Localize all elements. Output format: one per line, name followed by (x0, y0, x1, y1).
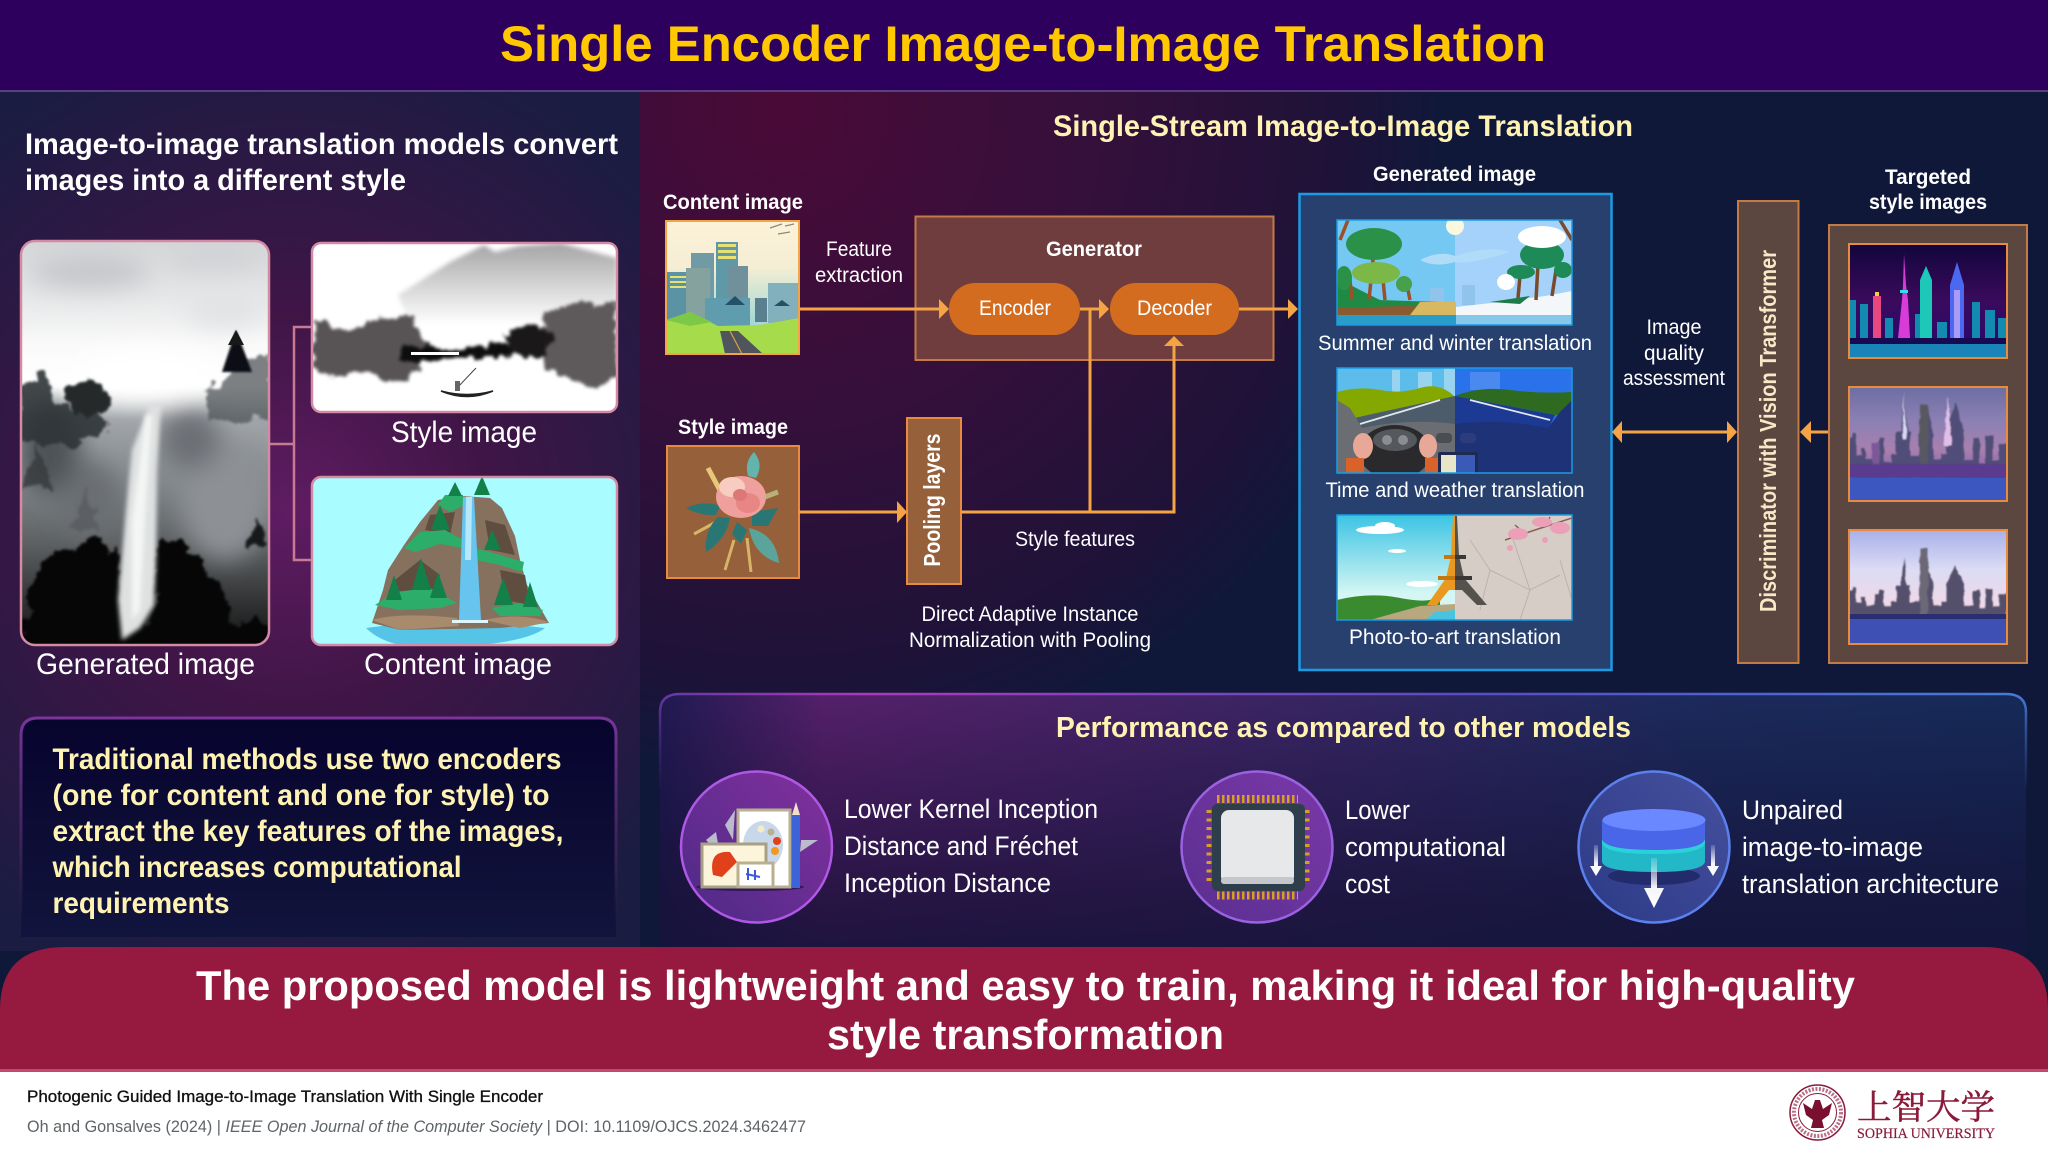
double arrow (1612, 421, 1737, 443)
text: unpaired architecture: Unpaired (1742, 795, 1843, 825)
image quality assessment label (1623, 315, 1725, 390)
text: unpaired architecture (1742, 795, 1999, 899)
connector lines (269, 327, 312, 560)
footer (0, 1072, 2048, 1152)
callout: traditional methods: extract the key features of the images, (52, 815, 564, 848)
citation details: Oh and Gonsalves (2024) | IEEE Open Journal of the Computer Society | DOI: 10.1109/OJCS.2024.3462477 (27, 1117, 806, 1136)
AdaIN caption (909, 602, 1151, 652)
image quality assessment label: assessment (1623, 366, 1725, 390)
generator block: Generator (1046, 237, 1143, 261)
text: lower distances: Distance and Fréchet (844, 831, 1078, 861)
logo: Sophia University (1790, 1080, 1995, 1142)
neon city (1849, 244, 2007, 358)
targeted style images panel (1829, 225, 2027, 663)
citation title: Photogenic Guided Image-to-Image Translation With Single Encoder (27, 1087, 543, 1106)
header band with title (0, 0, 2048, 92)
diagram heading: Single-Stream Image-to-Image Translation (1053, 110, 1633, 143)
AdaIN caption: Direct Adaptive Instance (922, 602, 1138, 626)
content colourful mountain image (312, 476, 617, 645)
image quality assessment label: quality (1644, 341, 1704, 365)
time and weather image (1337, 368, 1572, 479)
header band with title: Single Encoder Image-to-Image Translation (500, 16, 1546, 72)
icon: processor chip (1182, 772, 1332, 922)
image captions: Generated image (36, 648, 255, 681)
left heading: images into a different style (25, 164, 406, 197)
text: lower distances: Lower Kernel Inception (844, 794, 1098, 824)
content city image (666, 221, 799, 354)
pooling layers block (907, 418, 961, 584)
text: lower computational cost: cost (1345, 869, 1390, 899)
image captions (36, 416, 552, 681)
image captions: Content image (364, 648, 552, 681)
logo: Sophia University: SOPHIA UNIVERSITY (1857, 1126, 1995, 1142)
performance heading: Performance as compared to other models (1056, 712, 1631, 744)
conclusion banner (0, 947, 2048, 1072)
fisherman on boat (441, 368, 493, 396)
icon: database with arrows (1578, 772, 1730, 922)
flow arrows (799, 299, 1298, 523)
image quality assessment label: Image (1646, 315, 1702, 339)
translation captions: Time and weather translation (1326, 478, 1584, 502)
translation captions: Summer and winter translation (1318, 331, 1592, 355)
photo to art image (1337, 515, 1572, 620)
style features label: Style features (1015, 527, 1135, 551)
watercolor purple city (1849, 387, 2007, 501)
logo: Sophia University: 上智大学 (1857, 1080, 1995, 1129)
arrow from targeted style (1800, 421, 1828, 443)
text: lower computational cost: computational (1345, 832, 1506, 862)
style flower image (667, 446, 799, 578)
targeted style images label: Targeted (1885, 165, 1971, 189)
style ink landscape image (312, 243, 617, 412)
conclusion banner: style transformation (827, 1011, 1224, 1058)
icon: art frames and palette (681, 772, 832, 922)
style image label: Style image (678, 415, 788, 439)
decoder: Decoder (1137, 296, 1212, 320)
generator block (916, 216, 1274, 360)
image captions: Style image (391, 416, 537, 449)
background: right panel (640, 91, 2048, 951)
summer and winter image (1336, 217, 1572, 325)
callout: traditional methods: Traditional methods use two encoders (52, 743, 562, 776)
callout: traditional methods: requirements (52, 887, 230, 920)
generated image panel (1300, 194, 1612, 670)
feature extraction label (815, 237, 903, 287)
decoder (1110, 283, 1239, 335)
left heading (25, 128, 618, 197)
panel: image-to-image explanation (20, 128, 618, 681)
text: lower distances (844, 794, 1098, 898)
content image label: Content image (663, 190, 803, 214)
feature extraction label: Feature (826, 237, 892, 261)
left heading: Image-to-image translation models convert (25, 128, 618, 161)
text: lower computational cost (1345, 795, 1506, 899)
panel: performance compared to other models (660, 694, 2026, 960)
pooling layers block: Pooling layers (919, 434, 945, 566)
generated ink waterfall image (20, 241, 270, 660)
encoder: Encoder (979, 296, 1051, 320)
text: lower computational cost: Lower (1345, 795, 1410, 825)
translation captions (1318, 331, 1592, 649)
generated image label: Generated image (1373, 162, 1536, 186)
discriminator block: Discriminator with Vision Transformer (1755, 250, 1781, 612)
AdaIN caption: Normalization with Pooling (909, 628, 1151, 652)
text: unpaired architecture: image-to-image (1742, 832, 1923, 862)
callout: traditional methods (21, 718, 616, 937)
callout: traditional methods: which increases computational (52, 851, 462, 884)
discriminator block (1738, 201, 1798, 663)
feature extraction label: extraction (815, 263, 903, 287)
background: left panel (0, 91, 640, 951)
targeted style images label: style images (1869, 190, 1987, 214)
watercolor pale city (1849, 530, 2007, 644)
encoder (949, 283, 1080, 335)
translation captions: Photo-to-art translation (1349, 625, 1561, 649)
callout: traditional methods: (one for content and one for style) to (52, 779, 550, 812)
panel: single-stream diagram (663, 110, 2027, 670)
text: unpaired architecture: translation architecture (1742, 869, 1999, 899)
targeted style images label (1869, 165, 1987, 214)
text: lower distances: Inception Distance (844, 868, 1051, 898)
conclusion banner: The proposed model is lightweight and easy to train, making it ideal for high-quality (196, 962, 1856, 1009)
